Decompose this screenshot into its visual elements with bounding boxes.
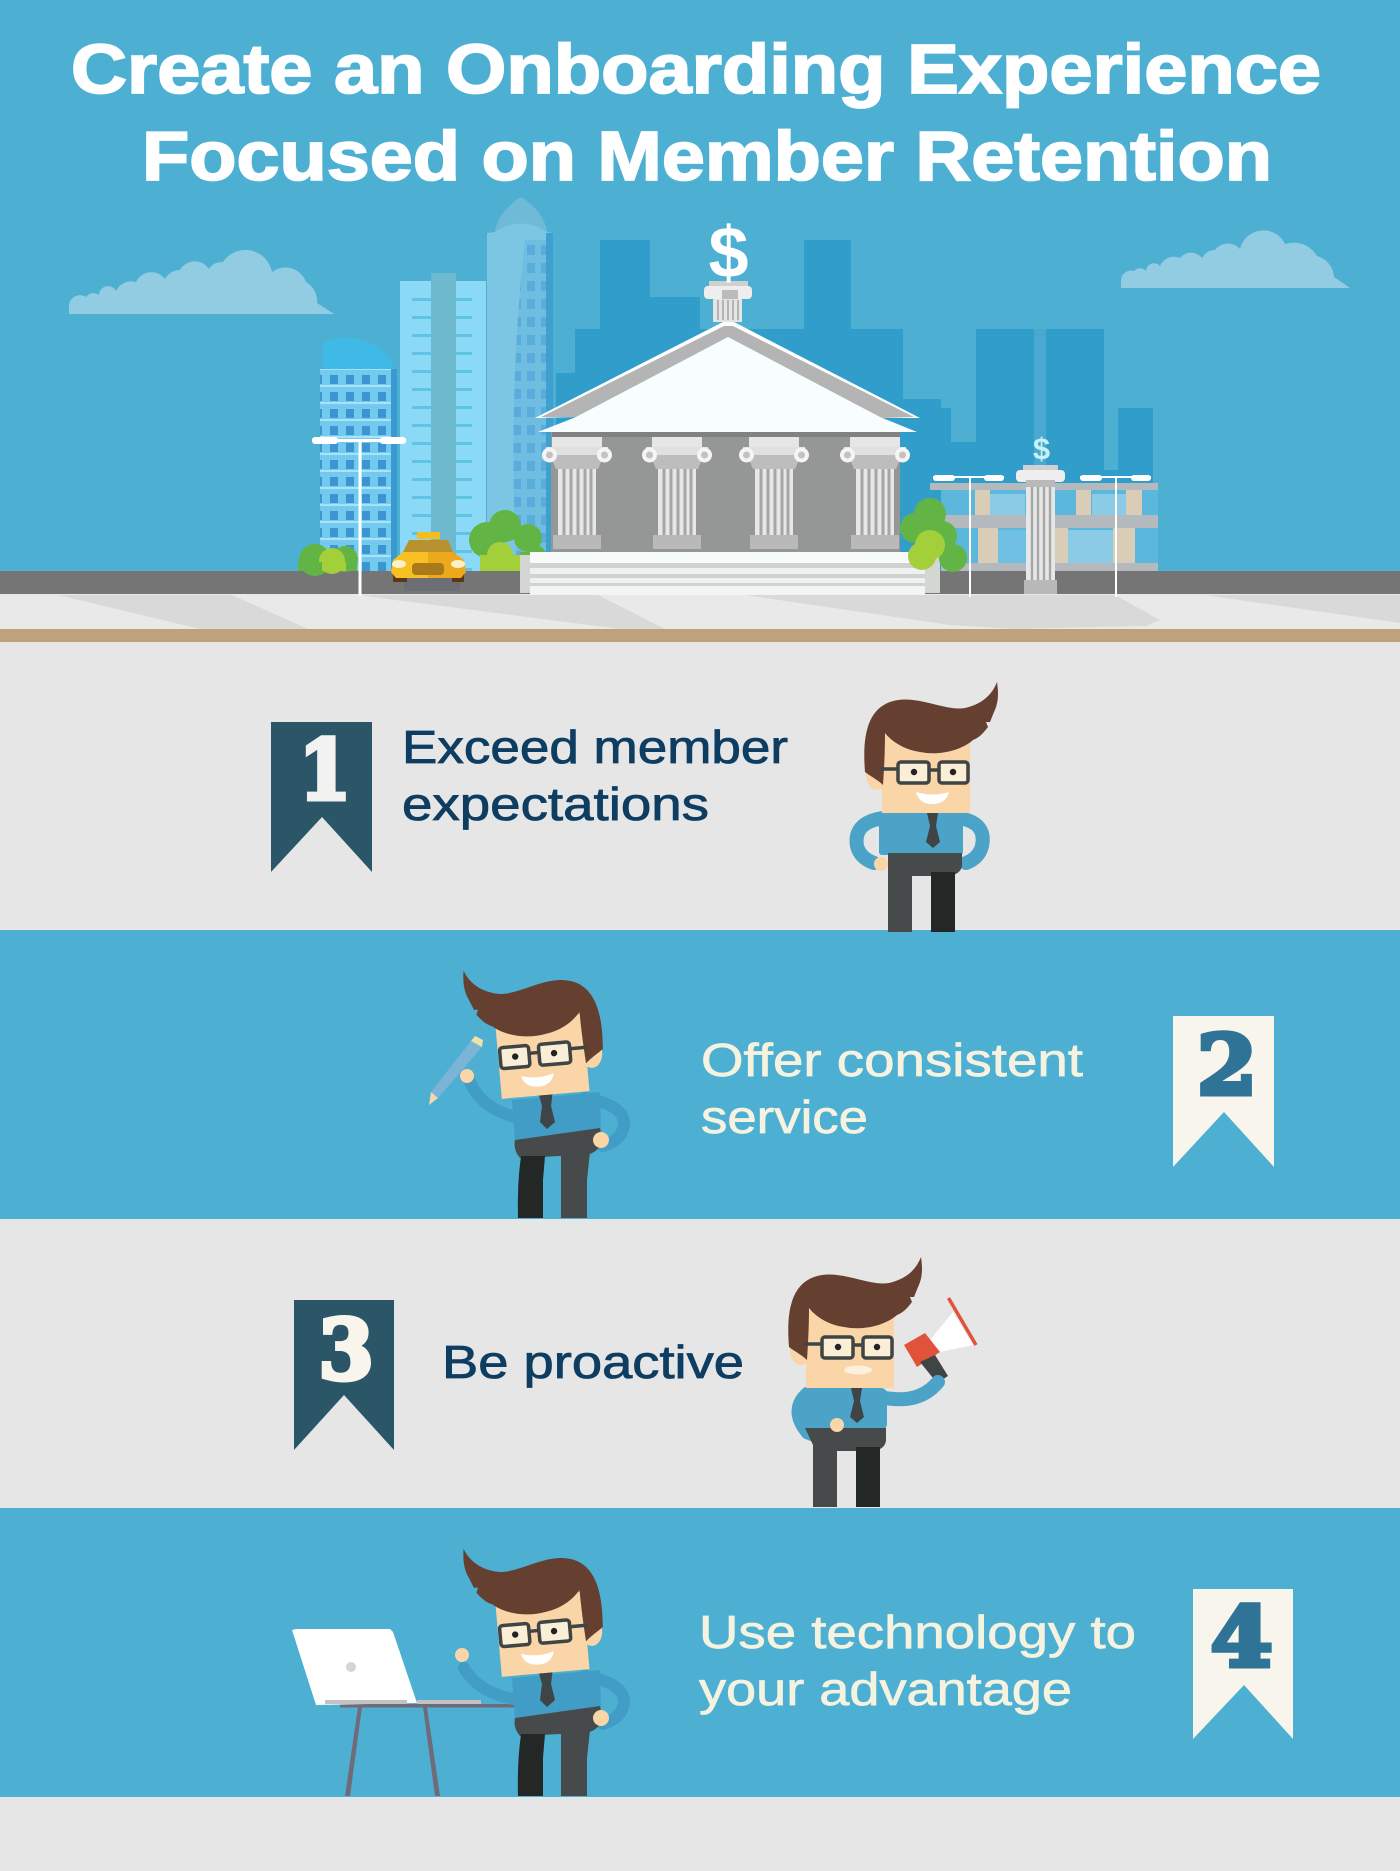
bank: roof — [535, 322, 920, 418]
pencil — [429, 1036, 483, 1105]
cloud left — [69, 250, 334, 314]
step 2 text: service — [701, 1091, 868, 1143]
street lamp right 1 — [933, 475, 1004, 597]
section 4 background — [0, 1508, 1400, 1797]
tower: striped skyscraper — [400, 273, 486, 571]
small bank building right — [900, 431, 1158, 597]
taxi — [391, 532, 466, 591]
right building: windows — [941, 490, 1158, 563]
section 1 background — [0, 642, 1400, 930]
right building: window panels — [990, 494, 1126, 564]
street lamp right 2 — [1080, 475, 1151, 597]
bank: steps — [520, 552, 940, 595]
bank: column 1 — [542, 437, 612, 549]
bottom band — [0, 1797, 1400, 1871]
step 1 ribbon — [271, 722, 372, 872]
step 2 text — [701, 1034, 1083, 1143]
megaphone — [904, 1298, 976, 1383]
title — [71, 30, 1321, 195]
bank: column 2 — [642, 437, 712, 549]
right building: beige pillars — [975, 490, 1142, 564]
character 1: standing with hands on hips — [857, 682, 998, 932]
bank: dollar sign: $ — [708, 213, 749, 293]
character 4: at laptop — [455, 1537, 624, 1796]
bank: column 4 — [840, 437, 910, 549]
step 4 text — [699, 1606, 1136, 1715]
bush left — [298, 544, 358, 576]
road — [0, 571, 1400, 595]
bank: column 3 — [739, 437, 809, 549]
tower: glass skyscraper — [487, 197, 553, 571]
laptop and table — [292, 1629, 528, 1796]
step 1 number: 1 — [299, 723, 351, 819]
right building: floors — [930, 483, 1158, 571]
step 1 text: expectations — [402, 778, 709, 830]
step 1 text: Exceed member — [402, 721, 788, 773]
step 3 text: Be proactive — [442, 1336, 744, 1388]
title: Create an Onboarding Experience — [71, 30, 1321, 108]
header background — [0, 0, 1400, 571]
step 3 number: 3 — [319, 1303, 374, 1399]
step 2 text: Offer consistent — [701, 1034, 1083, 1086]
sidewalk shadows — [58, 595, 1400, 629]
bush center-left — [469, 510, 546, 571]
city skyline silhouette — [556, 240, 1153, 571]
right building: pillar — [1016, 465, 1065, 594]
step 4 number: 4 — [1211, 1590, 1273, 1686]
step 3 ribbon — [294, 1300, 394, 1450]
step 4 ribbon — [1193, 1589, 1293, 1739]
character 3: with megaphone — [788, 1257, 976, 1507]
step 4 text: Use technology to — [699, 1606, 1136, 1658]
step 4 text: your advantage — [699, 1663, 1072, 1715]
cloud right — [1121, 230, 1350, 288]
step 2 ribbon — [1173, 1016, 1274, 1167]
sidewalk — [0, 594, 1400, 629]
bank building — [520, 213, 940, 595]
tower: domed building — [320, 338, 397, 571]
laptop — [292, 1629, 481, 1705]
table — [340, 1704, 528, 1796]
section 2 background — [0, 930, 1400, 1219]
tan ground strip — [0, 629, 1400, 642]
character 2: holding pencil — [429, 959, 624, 1218]
title: Focused on Member Retention — [142, 117, 1272, 195]
step 2 number: 2 — [1197, 1018, 1257, 1114]
right building: bush — [900, 498, 967, 572]
bank: top pedestal — [704, 281, 752, 322]
step 1 text — [402, 721, 788, 830]
right building: dollar sign: $ — [1033, 431, 1050, 466]
bank: wall — [551, 432, 900, 552]
section 3 background — [0, 1219, 1400, 1508]
street lamp left — [312, 437, 406, 596]
